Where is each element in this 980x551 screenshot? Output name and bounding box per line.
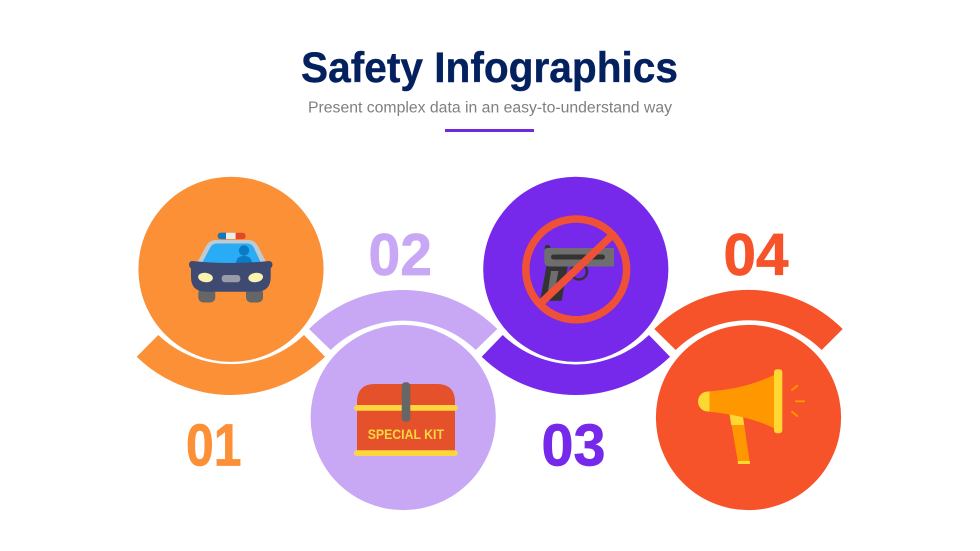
arc 02 bbox=[309, 290, 497, 350]
panel: step 02 bbox=[309, 221, 497, 510]
panel: step 03 bbox=[482, 177, 670, 478]
circle 01 bbox=[138, 177, 324, 362]
arc 04 bbox=[654, 290, 843, 350]
circle 04 bbox=[656, 325, 841, 510]
icon: special kit box: SPECIAL KIT bbox=[368, 426, 444, 442]
arc 01 bbox=[137, 335, 325, 395]
icon: no guns bbox=[526, 219, 627, 320]
icon: police car bbox=[189, 233, 272, 302]
icon: megaphone bbox=[698, 369, 804, 464]
number 01: 01 bbox=[186, 411, 242, 478]
arc 03 bbox=[482, 335, 670, 395]
number 03: 03 bbox=[542, 411, 606, 478]
number 04: 04 bbox=[724, 221, 788, 288]
icon: special kit box bbox=[354, 382, 458, 456]
number 02: 02 bbox=[368, 221, 432, 288]
header bbox=[301, 44, 678, 132]
panel: step 04 bbox=[654, 221, 843, 510]
subtitle: Present complex data in an easy-to-understand way bbox=[308, 100, 672, 116]
panel: step 01 bbox=[137, 177, 325, 478]
circle 02 bbox=[311, 325, 496, 510]
circle 03 bbox=[483, 177, 668, 362]
title: Safety Infographics bbox=[301, 44, 678, 92]
accent line bbox=[445, 129, 534, 132]
